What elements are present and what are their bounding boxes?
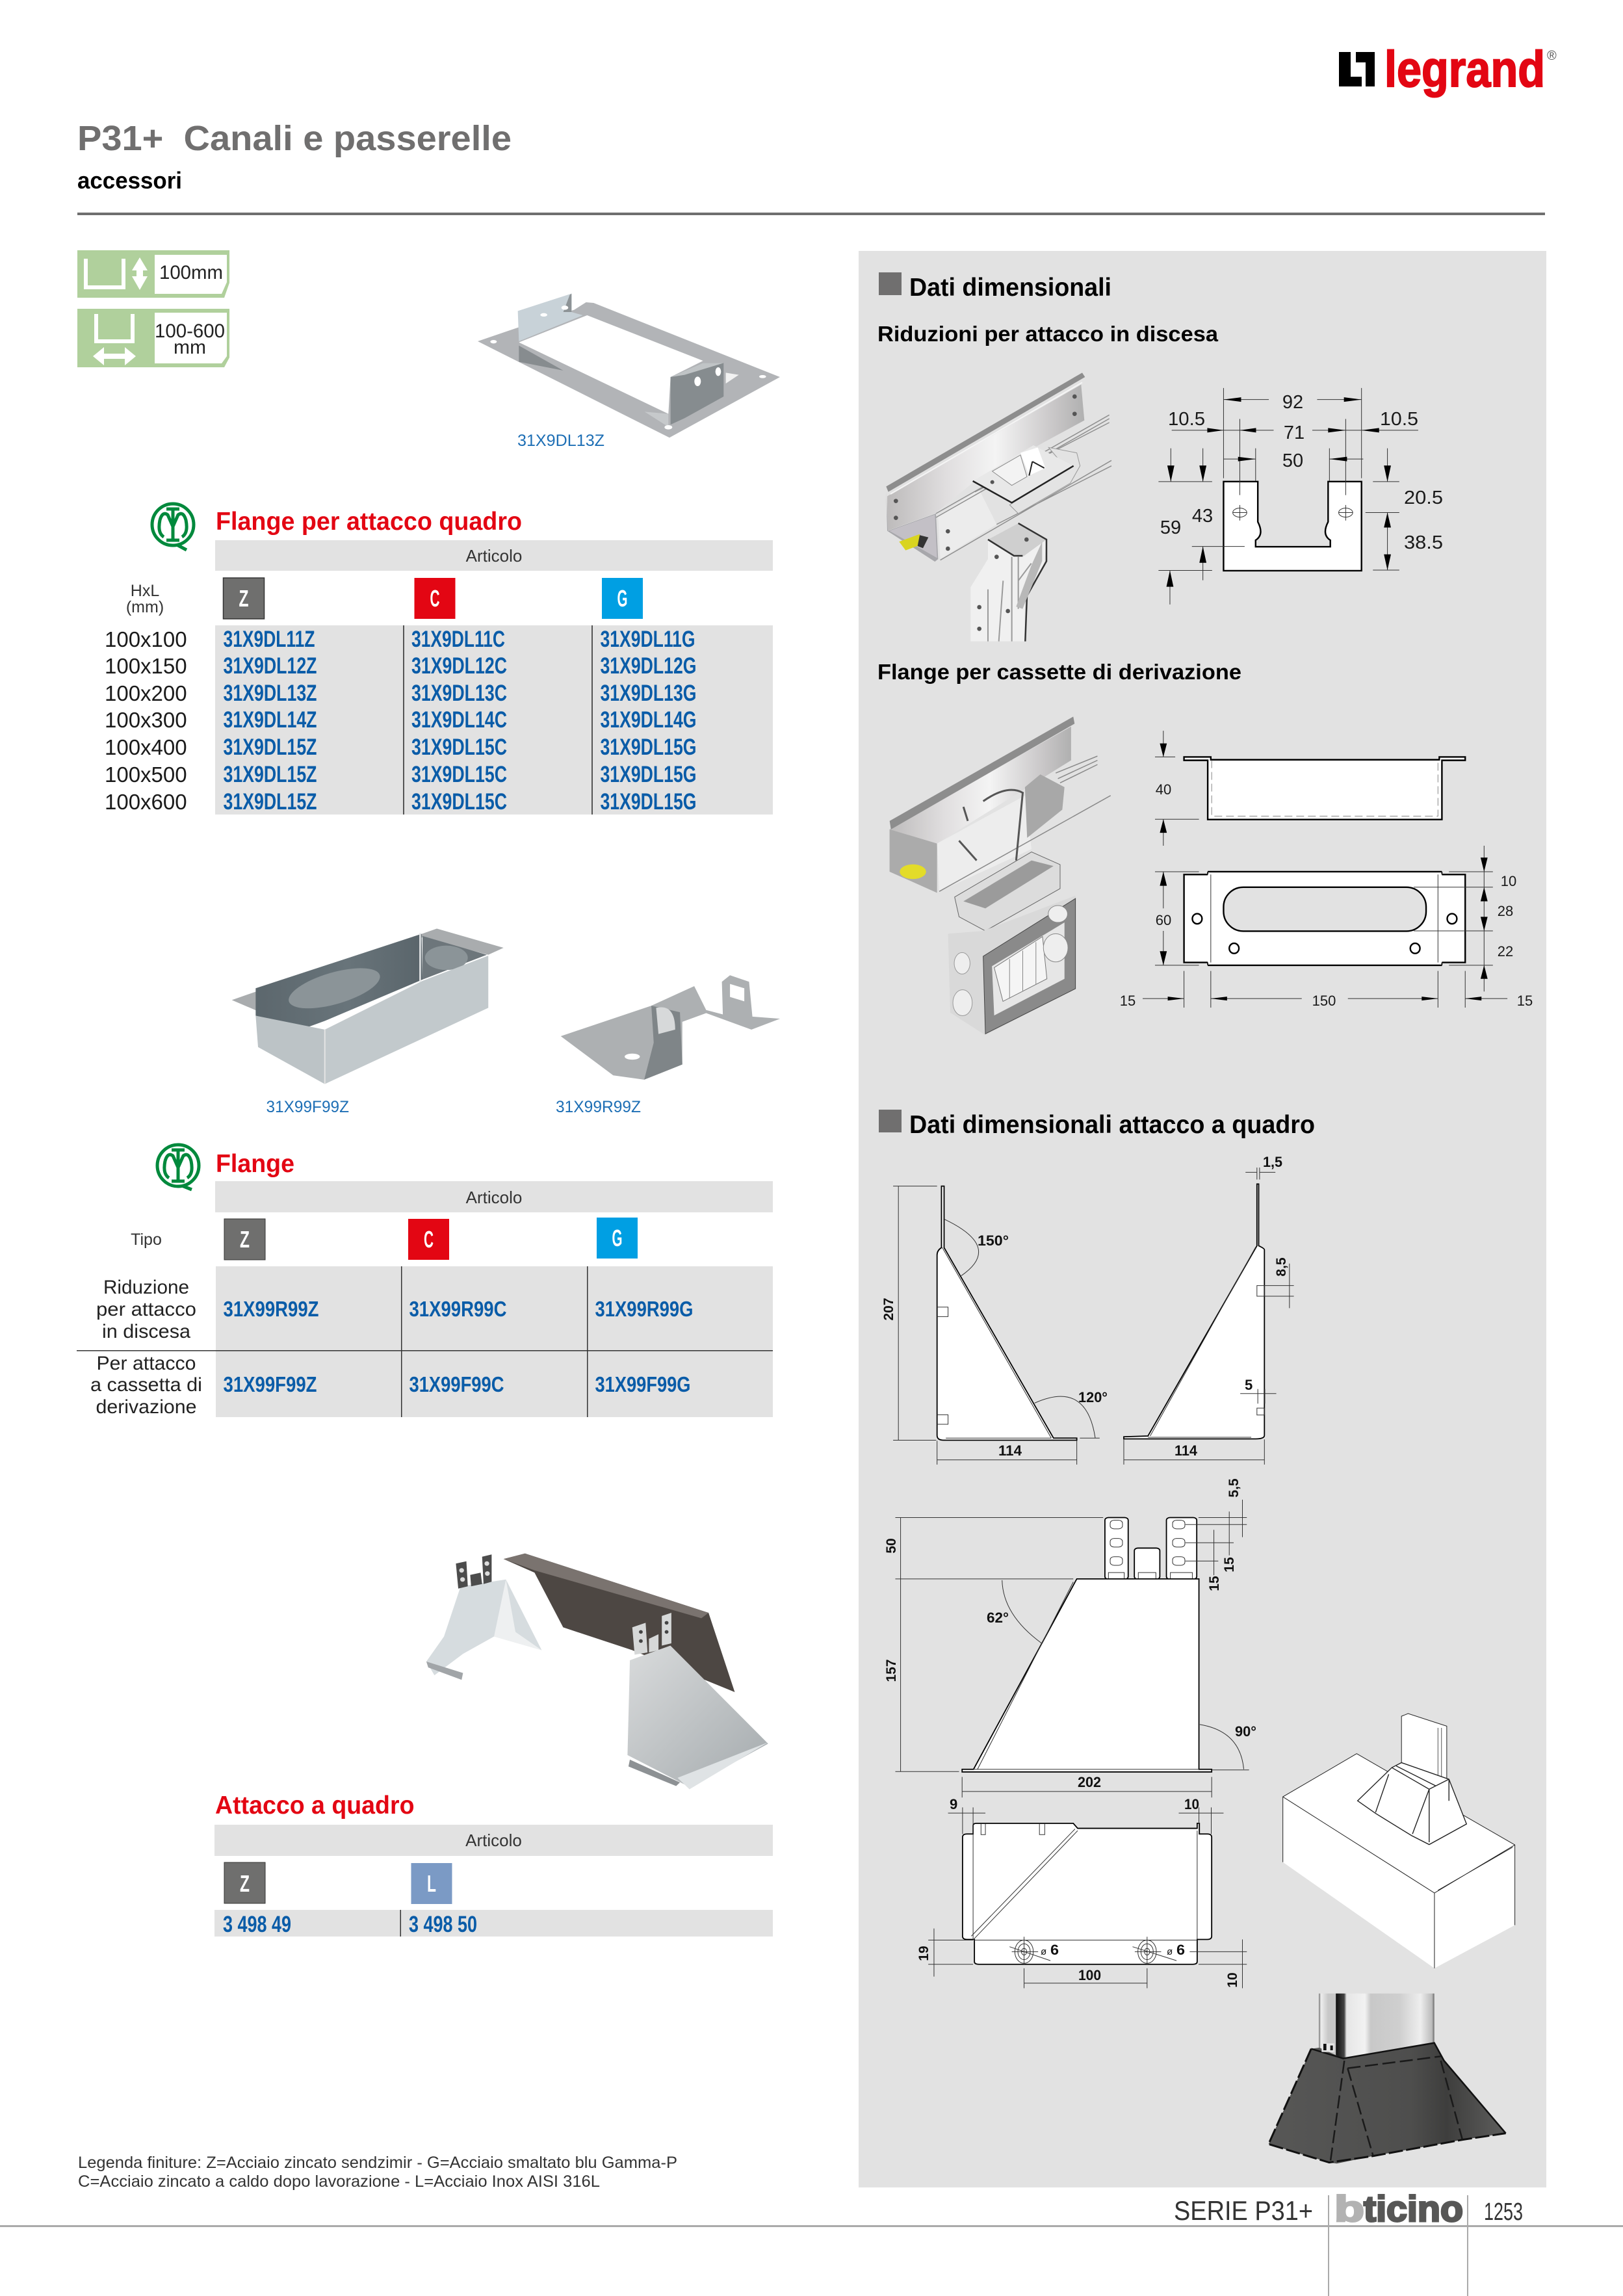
- codes Z: 31X9DL15Z: [224, 735, 317, 760]
- articolo header: [215, 540, 773, 571]
- swatch L: L: [427, 1870, 436, 1897]
- drawing: side view brackets: 150°: [978, 1233, 1009, 1249]
- codes Z: [224, 627, 317, 815]
- codes C: 31X9DL15C: [411, 789, 507, 815]
- drawing: front and plan view of base: [884, 1478, 1256, 1988]
- column label tipo: Tipo: [131, 1231, 162, 1249]
- swatch Z: Z: [240, 1226, 250, 1253]
- panel background: [859, 251, 1546, 2187]
- code 3 498 49: 3 498 49: [223, 1912, 291, 1937]
- caption: 31X99F99Z: 31X99F99Z: [266, 1098, 349, 1116]
- drawing: front and plan view of base: 100: [1078, 1967, 1101, 1983]
- swatch Z: [224, 578, 264, 619]
- legend of finishes: C=Acciaio zincato a caldo dopo lavorazione - L=Acciaio Inox AISI 316L: [78, 2172, 600, 2191]
- caption: 31X99R99Z: 31X99R99Z: [556, 1098, 641, 1116]
- codes row 2: 31X99F99Z: [224, 1372, 317, 1396]
- size labels: 100x200: [105, 681, 187, 705]
- codes C: 31X9DL15C: [411, 762, 507, 787]
- drawing: reduction dimensions: 10.5: [1380, 409, 1418, 430]
- heading: dati dimensionali attacco a quadro: Dati dimensionali attacco a quadro: [909, 1111, 1315, 1139]
- header rule: [77, 213, 1545, 215]
- drawing: front and plan view of base: 50: [884, 1538, 899, 1554]
- codes Z: 31X9DL15Z: [224, 789, 317, 815]
- drawing: flange dimensions: 10: [1501, 873, 1516, 889]
- codes C: 31X9DL13C: [411, 681, 507, 706]
- swatch C: [408, 1219, 449, 1260]
- icon: height 100mm: 100mm: [159, 262, 223, 283]
- drawing: side view brackets: 114: [998, 1442, 1022, 1459]
- articolo header: [215, 1181, 773, 1212]
- row label: riduzione: [96, 1277, 196, 1342]
- photo: dark base with stainless post: [1269, 1994, 1506, 2163]
- codes G: 31X9DL11G: [601, 627, 695, 652]
- illustration: reduction mounted on tray: [886, 372, 1111, 642]
- codes row 2: [224, 1372, 690, 1396]
- size labels: 100x400: [105, 735, 187, 759]
- drawing: front and plan view of base: 202: [1078, 1774, 1101, 1790]
- heading: attacco a quadro: Attacco a quadro: [215, 1792, 415, 1820]
- drawing: side view brackets: 114: [1175, 1442, 1198, 1459]
- drawing: flange dimensions: 60: [1156, 912, 1171, 928]
- articolo header: Articolo: [465, 1831, 522, 1850]
- panel: dati dimensionali: [859, 251, 1546, 2187]
- articolo header: Articolo: [466, 1188, 522, 1207]
- footer: page number: 1253: [1484, 2198, 1523, 2226]
- logo: legrand: ®: [1547, 49, 1557, 63]
- heading marker: [879, 272, 902, 295]
- legend of finishes: Legenda finiture: Z=Acciaio zincato sendzimir - G=Acciaio smaltato blu Gamma-P: [78, 2154, 677, 2172]
- heading: flange: Flange: [216, 1150, 294, 1178]
- icon: height 100mm: [77, 250, 229, 298]
- drawing: front and plan view of base: 62°: [987, 1610, 1009, 1626]
- drawing: flange dimensions: 150: [1312, 993, 1336, 1009]
- column label HxL: (mm): [126, 598, 164, 616]
- swatch L: [411, 1863, 452, 1904]
- subheading: riduzioni: Riduzioni per attacco in discesa: [877, 322, 1219, 346]
- drawing: front and plan view of base: 6: [1176, 1942, 1185, 1958]
- codes row 1: 31X99R99C: [409, 1297, 507, 1321]
- codes row 2: 31X99F99G: [595, 1372, 690, 1396]
- drawing: reduction dimensions: 71: [1284, 423, 1305, 443]
- codes C: 31X9DL11C: [411, 627, 505, 652]
- drawing: front and plan view of base: 5,5: [1227, 1478, 1241, 1498]
- codes row 1: 31X99R99Z: [224, 1297, 318, 1321]
- drawing: side view brackets: 120°: [1078, 1389, 1108, 1405]
- codes G: 31X9DL15G: [601, 789, 697, 815]
- codes C: 31X9DL15C: [411, 735, 507, 760]
- drawing: front and plan view of base: 15: [1222, 1557, 1237, 1572]
- row label: per attacco: Per attacco: [96, 1353, 196, 1374]
- title: P31+ Canali e passerelle: [77, 119, 512, 158]
- table: flange per attacco quadro: [105, 540, 773, 815]
- footer: bticino logo: b: [1334, 2188, 1364, 2229]
- caption: 31X9DL13Z: 31X9DL13Z: [517, 432, 604, 450]
- drawing: side view brackets: [881, 1154, 1294, 1465]
- illustration: isometric block with post: [1283, 1714, 1515, 1968]
- icon: width 100-600mm: mm: [174, 337, 206, 358]
- swatch C: C: [430, 585, 439, 612]
- drawing: front and plan view of base: 10: [1225, 1972, 1240, 1988]
- codes G: 31X9DL15G: [601, 735, 697, 760]
- heading marker: [879, 1110, 902, 1132]
- swatch C: [415, 578, 455, 619]
- drawing: reduction dimensions: 50: [1282, 450, 1303, 471]
- heading: dati dimensionali: Dati dimensionali: [909, 274, 1111, 302]
- column label HxL: HxL: [131, 582, 159, 600]
- data background: [216, 1266, 773, 1417]
- swatch G: [602, 578, 643, 619]
- table: flange: [77, 1181, 773, 1418]
- icon: width 100-600mm: 100-600: [155, 320, 225, 342]
- drawing: front and plan view of base: 10: [1184, 1796, 1199, 1812]
- product photo: reduction 31X99R99Z: [561, 975, 780, 1080]
- swatch Z: [224, 1219, 265, 1260]
- footer: bticino logo: ticino: [1364, 2188, 1463, 2229]
- data background: [215, 625, 773, 815]
- illustration: flange with junction box: [890, 716, 1111, 1035]
- drawing: flange dimensions: 15: [1120, 993, 1136, 1009]
- drawing: front and plan view of base: ø: [1167, 1946, 1173, 1957]
- icon: width 100-600mm: [77, 309, 229, 367]
- row label: per attacco: derivazione: [96, 1396, 196, 1418]
- subtitle: accessori: [77, 167, 182, 194]
- drawing: flange dimensions: 22: [1498, 943, 1513, 959]
- codes Z: 31X9DL11Z: [224, 627, 315, 652]
- swatch Z: [224, 1862, 265, 1903]
- drawing: front and plan view of base: 15: [1207, 1576, 1222, 1591]
- row label: per attacco: [90, 1353, 202, 1418]
- codes row 1: [224, 1297, 693, 1321]
- table: attacco a quadro: [214, 1825, 773, 1937]
- codes Z: 31X9DL12Z: [224, 653, 317, 679]
- swatch Z: Z: [240, 1870, 250, 1897]
- codes C: [411, 627, 507, 815]
- drawing: side view brackets: 1,5: [1263, 1154, 1282, 1170]
- codes G: 31X9DL12G: [601, 653, 697, 679]
- subheading: flange per cassette: Flange per cassette di derivazione: [877, 660, 1241, 684]
- drawing: front and plan view of base: 157: [884, 1659, 899, 1682]
- codes C: 31X9DL14C: [411, 707, 507, 733]
- size labels: [105, 627, 187, 814]
- logo: legrand: legrand: [1384, 40, 1545, 98]
- drawing: flange dimensions: 15: [1517, 993, 1533, 1009]
- column label HxL: [126, 582, 164, 616]
- product photo: box flange 31X99F99Z: [232, 929, 504, 1084]
- code 3 498 50: 3 498 50: [409, 1912, 477, 1937]
- articolo header: [214, 1825, 773, 1856]
- row label: riduzione: Riduzione: [103, 1277, 189, 1298]
- size labels: 100x500: [105, 763, 187, 787]
- swatch G: G: [617, 585, 628, 612]
- data row: [214, 1910, 773, 1937]
- size labels: 100x300: [105, 708, 187, 732]
- drawing: flange dimensions: 28: [1498, 903, 1513, 919]
- row label: riduzione: per attacco: [96, 1299, 196, 1320]
- row label: per attacco: a cassetta di: [90, 1374, 202, 1396]
- codes G: 31X9DL13G: [601, 681, 697, 706]
- codes row 2: 31X99F99C: [409, 1372, 504, 1396]
- drawing: front and plan view of base: ø: [1041, 1946, 1046, 1957]
- drawing: front and plan view of base: 90°: [1235, 1723, 1256, 1740]
- drawing: reduction dimensions: 10.5: [1168, 409, 1205, 430]
- size labels: 100x100: [105, 627, 187, 651]
- drawing: front and plan view of base: 19: [916, 1946, 931, 1961]
- drawing: front and plan view of base: 6: [1050, 1942, 1059, 1958]
- codes row 1: 31X99R99G: [595, 1297, 693, 1321]
- codes C: 31X9DL12C: [411, 653, 507, 679]
- articolo header: Articolo: [466, 546, 522, 566]
- codes Z: 31X9DL15Z: [224, 762, 317, 787]
- drawing: side view brackets: 5: [1245, 1377, 1253, 1393]
- swatch Z: Z: [239, 585, 248, 612]
- swatch G: [597, 1218, 638, 1259]
- heading: flange per attacco quadro: Flange per attacco quadro: [216, 508, 522, 536]
- codes G: 31X9DL15G: [601, 762, 697, 787]
- drawing: front and plan view of base: 9: [950, 1796, 957, 1812]
- product photo: flange 31X9DL13Z: [478, 294, 780, 437]
- drawing: flange dimensions: 40: [1156, 781, 1171, 798]
- codes Z: 31X9DL13Z: [224, 681, 317, 706]
- drawing: reduction dimensions: 59: [1160, 517, 1181, 538]
- swatch C: C: [424, 1226, 434, 1253]
- drawing: reduction dimensions: 38.5: [1404, 532, 1443, 553]
- drawing: side view brackets: 8,5: [1274, 1257, 1289, 1277]
- product photo: attacco a quadro: [426, 1554, 768, 1789]
- drawing: reduction dimensions: 43: [1192, 506, 1213, 527]
- codes G: 31X9DL14G: [601, 707, 697, 733]
- drawing: side view brackets: 207: [881, 1298, 896, 1321]
- size labels: 100x600: [105, 790, 187, 814]
- legend of finishes: [78, 2154, 677, 2191]
- quality mark: flange: [157, 1145, 199, 1190]
- footer: series label: SERIE P31+: [1174, 2195, 1313, 2226]
- drawing: flange dimensions: [1120, 731, 1533, 1009]
- drawing: reduction dimensions: 92: [1282, 392, 1303, 413]
- swatch G: G: [612, 1225, 623, 1251]
- quality mark: flange per attacco quadro: [152, 504, 194, 550]
- drawing: reduction dimensions: [1158, 388, 1443, 605]
- drawing: reduction dimensions: 20.5: [1404, 488, 1443, 508]
- size labels: 100x150: [105, 654, 187, 678]
- codes Z: 31X9DL14Z: [224, 707, 317, 733]
- codes G: [601, 627, 697, 815]
- row label: riduzione: in discesa: [102, 1321, 190, 1342]
